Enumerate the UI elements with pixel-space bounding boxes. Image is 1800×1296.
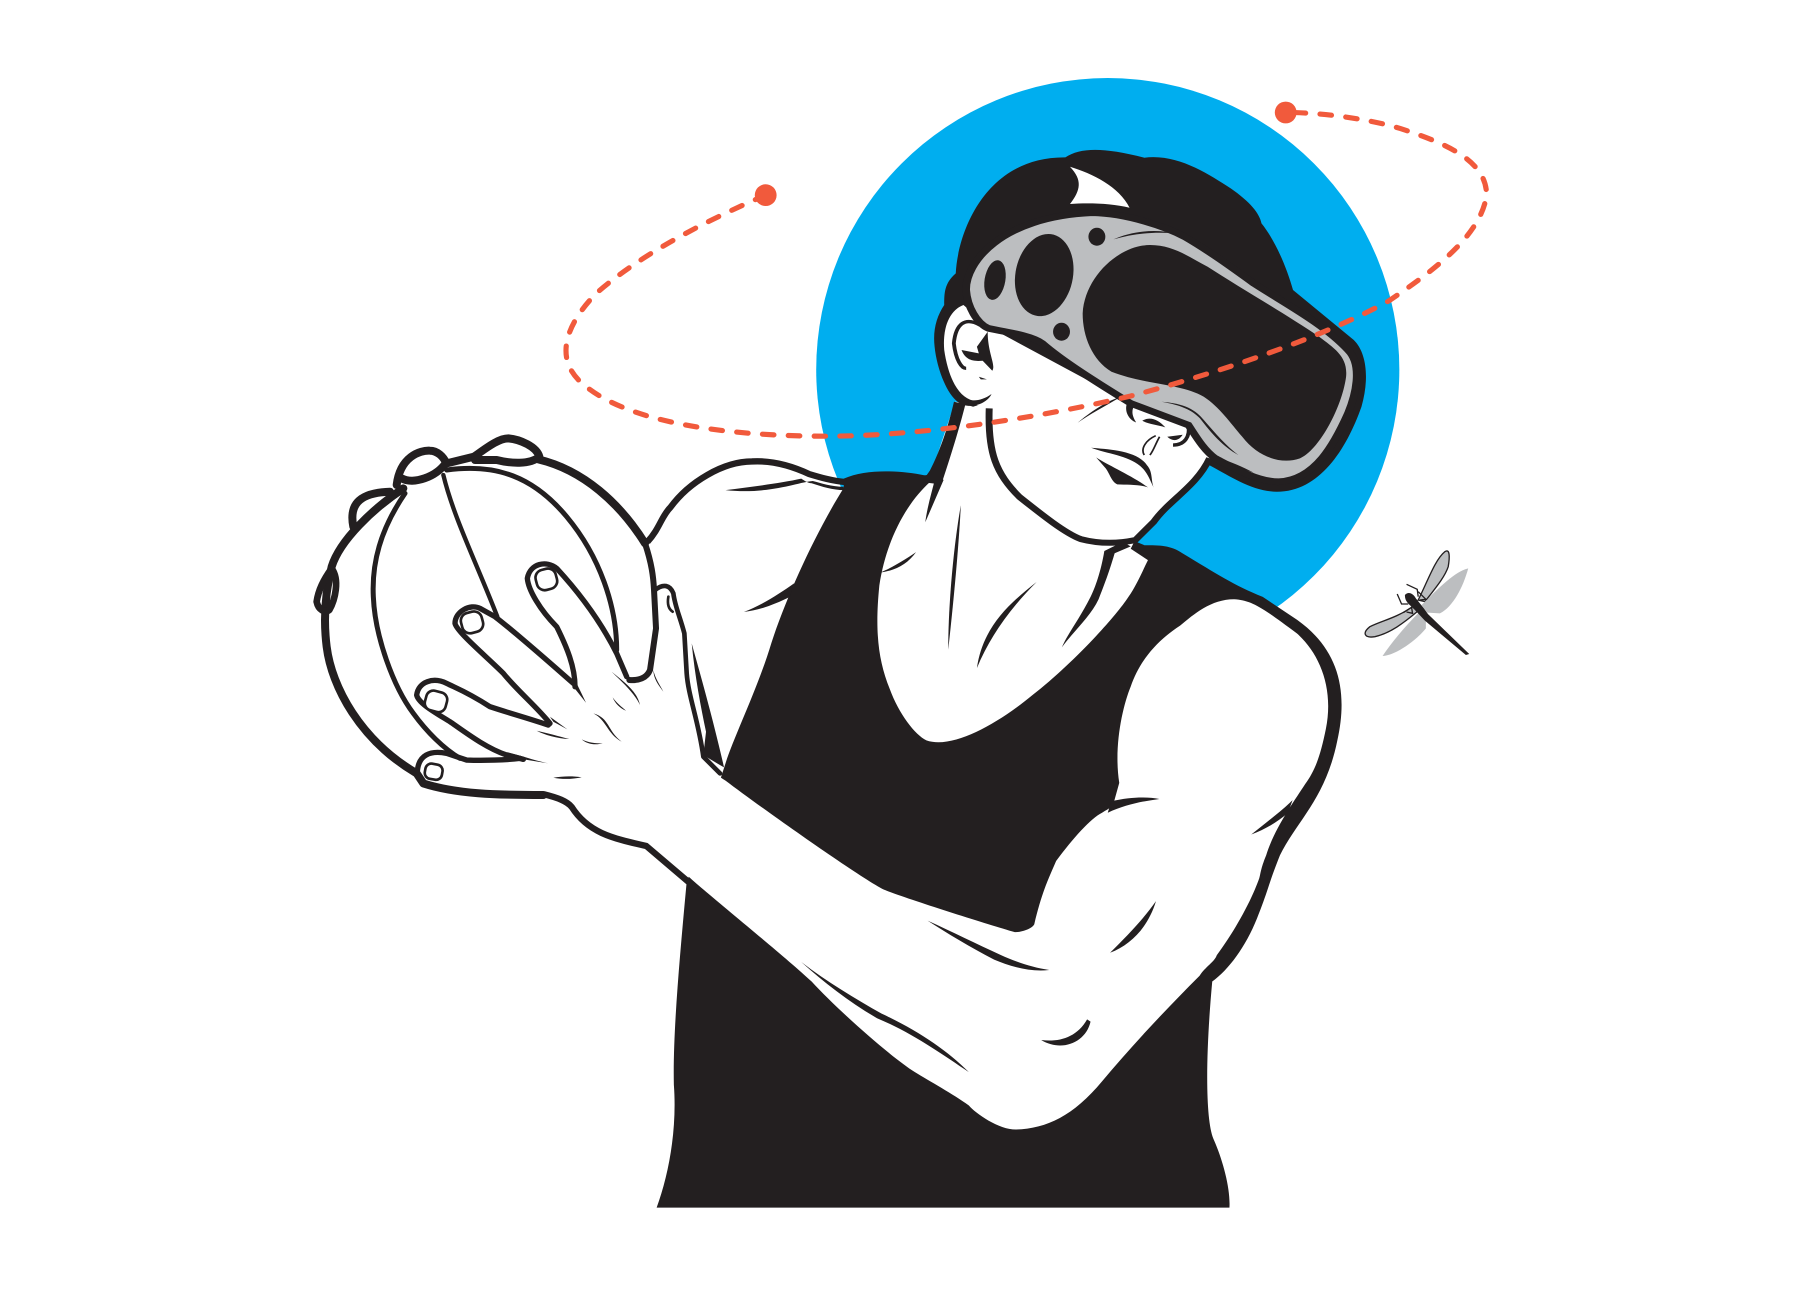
ball and hand outer outline (317, 438, 720, 795)
jaw line (989, 408, 1210, 543)
thumb side and wrist (655, 586, 720, 773)
mouth (1096, 457, 1148, 487)
wings (1365, 551, 1468, 656)
face (973, 327, 1210, 543)
path start dot (755, 184, 777, 206)
hand and ball (317, 438, 724, 795)
shoulder strap wedge (726, 479, 844, 491)
elbow muscle marks (801, 901, 1156, 1072)
chest line marks (879, 402, 1295, 668)
ball seams (373, 493, 460, 758)
headset sensors (981, 228, 1254, 473)
red dashed flight path (566, 102, 1487, 436)
index finger (527, 564, 627, 687)
pinky finger (417, 752, 520, 772)
dragonfly (1365, 551, 1469, 656)
legs (1397, 584, 1426, 613)
fingertips along the ball (397, 451, 446, 485)
fingernails (534, 567, 559, 592)
ear (944, 305, 993, 406)
knuckle and palm creases (507, 643, 724, 779)
armpit wedge (744, 583, 794, 612)
armpit crease (1108, 797, 1159, 813)
arm (544, 599, 1328, 1130)
body (1405, 593, 1469, 655)
blue circle backdrop (816, 78, 1399, 661)
nose and eyebrow marks (1126, 403, 1183, 440)
hair and outer silhouette (934, 150, 1366, 492)
arm outline near wrist (544, 794, 700, 892)
upper arm crease (1251, 800, 1293, 835)
eye crease (1078, 397, 1121, 423)
upper lip (1091, 448, 1154, 488)
path end dot (1275, 102, 1297, 123)
black tank top (657, 461, 1342, 1208)
shoulder behind ball (647, 461, 846, 612)
headset shell (966, 213, 1357, 482)
white chest and neck (877, 402, 1295, 742)
middle finger (455, 607, 573, 723)
head with VR headset (934, 150, 1366, 543)
headset visor (1083, 245, 1346, 461)
ring finger (417, 680, 548, 759)
hair highlight (1070, 167, 1130, 208)
